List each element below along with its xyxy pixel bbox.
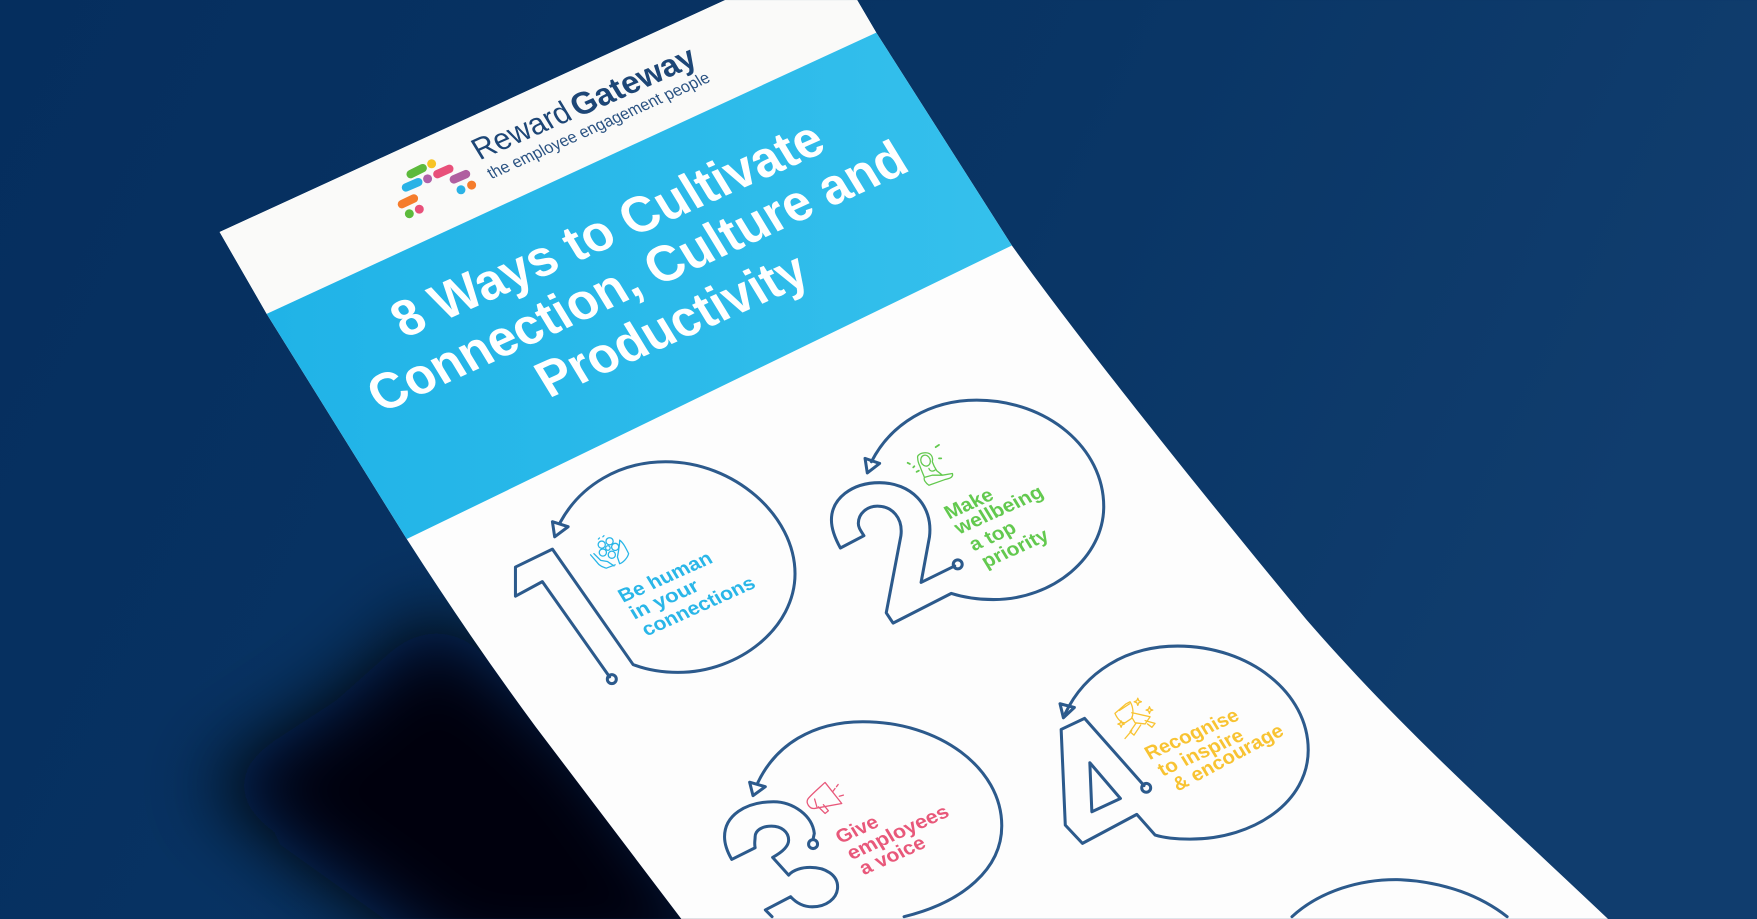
- label: in your: [625, 575, 704, 624]
- item 4: numeral and loop: [1060, 646, 1308, 843]
- label: to inspire: [1154, 725, 1248, 781]
- logo mark: [402, 159, 476, 218]
- dot: [953, 560, 962, 569]
- arrow head: [865, 458, 880, 473]
- label: Recognise: [1141, 705, 1243, 764]
- item 3: numeral and loop: [725, 722, 1002, 917]
- wordmark: Gateway: [563, 39, 703, 123]
- label: priority: [977, 525, 1053, 572]
- logo: Reward Gateway: [402, 39, 713, 218]
- item 2: numeral and loop: [831, 400, 1104, 623]
- arrow head: [750, 782, 765, 796]
- label: Be human: [614, 548, 717, 607]
- panel: title band: [267, 33, 1012, 539]
- icon: fist with trophy: [1115, 698, 1155, 739]
- dot: [1142, 783, 1151, 792]
- tagline: the employee engagement people: [484, 68, 713, 183]
- icon: meditating person: [908, 445, 953, 485]
- label: [832, 801, 953, 879]
- arrow head: [552, 522, 568, 537]
- label: [1141, 705, 1288, 796]
- numeral 1 outline with loop arrow: [515, 462, 795, 677]
- label: Make: [940, 484, 998, 524]
- label: & encourage: [1169, 720, 1288, 796]
- paper shadow: [207, 611, 689, 919]
- label: [614, 548, 760, 641]
- panel: paper sheet: [220, 0, 1608, 919]
- icon: hands holding flower: [591, 536, 629, 568]
- wordmark: Reward: [465, 95, 578, 166]
- dot: [809, 840, 818, 849]
- numeral 2 outline with loop arrow: [831, 400, 1104, 623]
- label: employees: [843, 801, 953, 864]
- label: a top: [965, 517, 1020, 556]
- numeral 4 inner triangle: [1090, 763, 1120, 812]
- numeral 3 outline with loop arrow: [725, 722, 1002, 917]
- label: connections: [638, 572, 760, 641]
- label: a voice: [855, 832, 930, 879]
- item 5: partial loop: [1292, 880, 1507, 917]
- label: [940, 481, 1053, 572]
- panel: header strip: [220, 0, 876, 314]
- wordmark: [465, 39, 703, 166]
- label: Give: [832, 811, 883, 848]
- arrow head: [1060, 704, 1074, 718]
- icon: megaphone: [807, 782, 843, 813]
- item 1: numeral and loop: [515, 462, 795, 684]
- title: Connection, Culture and: [357, 130, 918, 424]
- title: 8 Ways to Cultivate: [380, 110, 835, 349]
- numeral 4 outline with loop arrow: [1061, 646, 1308, 843]
- dot: [607, 675, 616, 684]
- title: Productivity: [525, 241, 819, 409]
- label: wellbeing: [949, 481, 1048, 539]
